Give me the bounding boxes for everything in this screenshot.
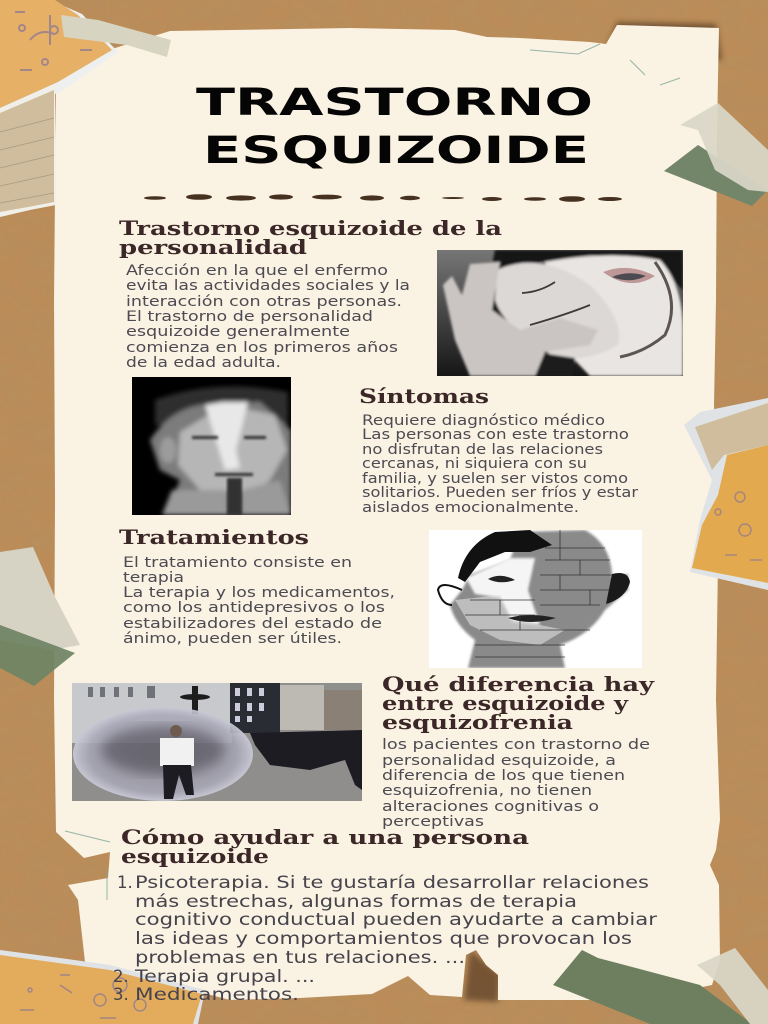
heading: difference: esquizofrenia — [382, 710, 573, 734]
text block: symptoms: cercanas, ni siquiera con su — [362, 456, 587, 472]
heading: definition — [119, 216, 502, 259]
text block: definition — [126, 263, 410, 371]
heading: treatments: Tratamientos — [119, 525, 309, 549]
text block: definition: El trastorno de personalidad — [126, 309, 373, 325]
numbered list: 2. — [113, 967, 129, 986]
text block: symptoms: Las personas con este trastorno — [362, 427, 629, 443]
torn paper shadow — [464, 22, 722, 1002]
torn paper bottom left — [0, 950, 205, 1024]
numbered list: las ideas y comportamientos que provocan los — [135, 929, 632, 948]
photo: person in bubble on street — [72, 683, 362, 801]
numbered list: 3. — [113, 985, 129, 1004]
text block: definition: de la edad adulta. — [126, 355, 281, 371]
text block: definition: comienza en los primeros años — [126, 340, 398, 356]
text block: definition: esquizoide generalmente — [126, 324, 350, 340]
torn papers right — [684, 398, 768, 590]
photo: woman holding mask — [437, 250, 683, 376]
brush dashed divider — [144, 194, 622, 202]
panel: difference — [72, 672, 656, 830]
text block: difference: esquizofrenia, no tienen — [382, 783, 592, 799]
text block: treatments: como los antidepresivos o los — [123, 600, 385, 616]
numbered list: 1. — [117, 873, 133, 892]
panel: how to help — [113, 825, 657, 1004]
title — [196, 81, 593, 172]
text block: symptoms: solitarios. Pueden ser fríos y estar — [362, 485, 638, 501]
heading: difference: Qué diferencia hay — [382, 672, 656, 696]
heading: difference: entre esquizoide y — [382, 691, 630, 715]
heading: definition: Trastorno esquizoide de la — [119, 216, 502, 240]
heading: how to help: Cómo ayudar a una persona — [121, 825, 529, 849]
numbered list: Psicoterapia. Si te gustaría desarrollar relaciones — [135, 873, 649, 892]
text block: symptoms: familia, y suelen ser vistos como — [362, 471, 628, 487]
text block: treatments: terapia — [123, 570, 184, 586]
paper cracks — [65, 44, 680, 900]
numbered list: Medicamentos. — [135, 985, 299, 1004]
text block: treatments: estabilizadores del estado de — [123, 616, 382, 632]
numbered list: Terapia grupal. ... — [134, 967, 315, 986]
heading: difference — [382, 672, 656, 734]
text block: difference: perceptivas — [382, 814, 484, 830]
tape top right — [664, 103, 768, 206]
numbered list: más estrechas, algunas formas de terapia — [135, 892, 577, 911]
numbered list: cognitivo conductual pueden ayudarte a cambiar — [135, 910, 657, 929]
text block: symptoms: Requiere diagnóstico médico — [362, 413, 605, 429]
text block: treatments: El tratamiento consiste en — [123, 555, 352, 571]
tape top left — [61, 15, 171, 57]
photo: man with hands over face — [132, 377, 291, 515]
panel: symptoms — [132, 377, 638, 516]
text block: difference: alteraciones cognitivas o — [382, 799, 599, 815]
text block: treatments: ánimo, pueden ser útiles. — [123, 631, 342, 647]
panel: definition — [119, 216, 683, 376]
text block: difference: los pacientes con trastorno de — [382, 737, 650, 753]
panel: treatments — [119, 525, 642, 668]
illustration: brick face — [429, 530, 642, 668]
text block: difference: diferencia de los que tienen — [382, 768, 625, 784]
numbered list: problemas en tus relaciones. ... — [135, 948, 465, 967]
text block: treatments — [123, 555, 395, 647]
tape left middle — [0, 547, 80, 686]
heading: how to help — [121, 825, 529, 868]
text block: difference — [382, 737, 650, 830]
numbered list — [113, 873, 657, 1004]
title: ESQUIZOIDE — [203, 129, 589, 172]
tape bottom right — [553, 948, 768, 1024]
text block: definition: Afección en la que el enfermo — [126, 263, 388, 279]
text block: definition: evita las actividades sociales y la — [126, 278, 410, 294]
heading: how to help: esquizoide — [121, 844, 269, 868]
decorative lined paper left — [0, 85, 56, 217]
text block: symptoms — [362, 413, 638, 516]
decorative orange paper top left — [0, 0, 118, 115]
text block: difference: personalidad esquizoide, a — [382, 753, 616, 769]
title: TRASTORNO — [196, 81, 593, 124]
text block: definition: interacción con otras personas. — [126, 294, 402, 310]
text block: treatments: La terapia y los medicamentos, — [123, 585, 395, 601]
heading: definition: personalidad — [119, 235, 307, 259]
text block: symptoms: aislados emocionalmente. — [362, 500, 579, 516]
text block: symptoms: no disfrutan de las relaciones — [362, 442, 603, 458]
heading: symptoms: Síntomas — [359, 384, 489, 408]
